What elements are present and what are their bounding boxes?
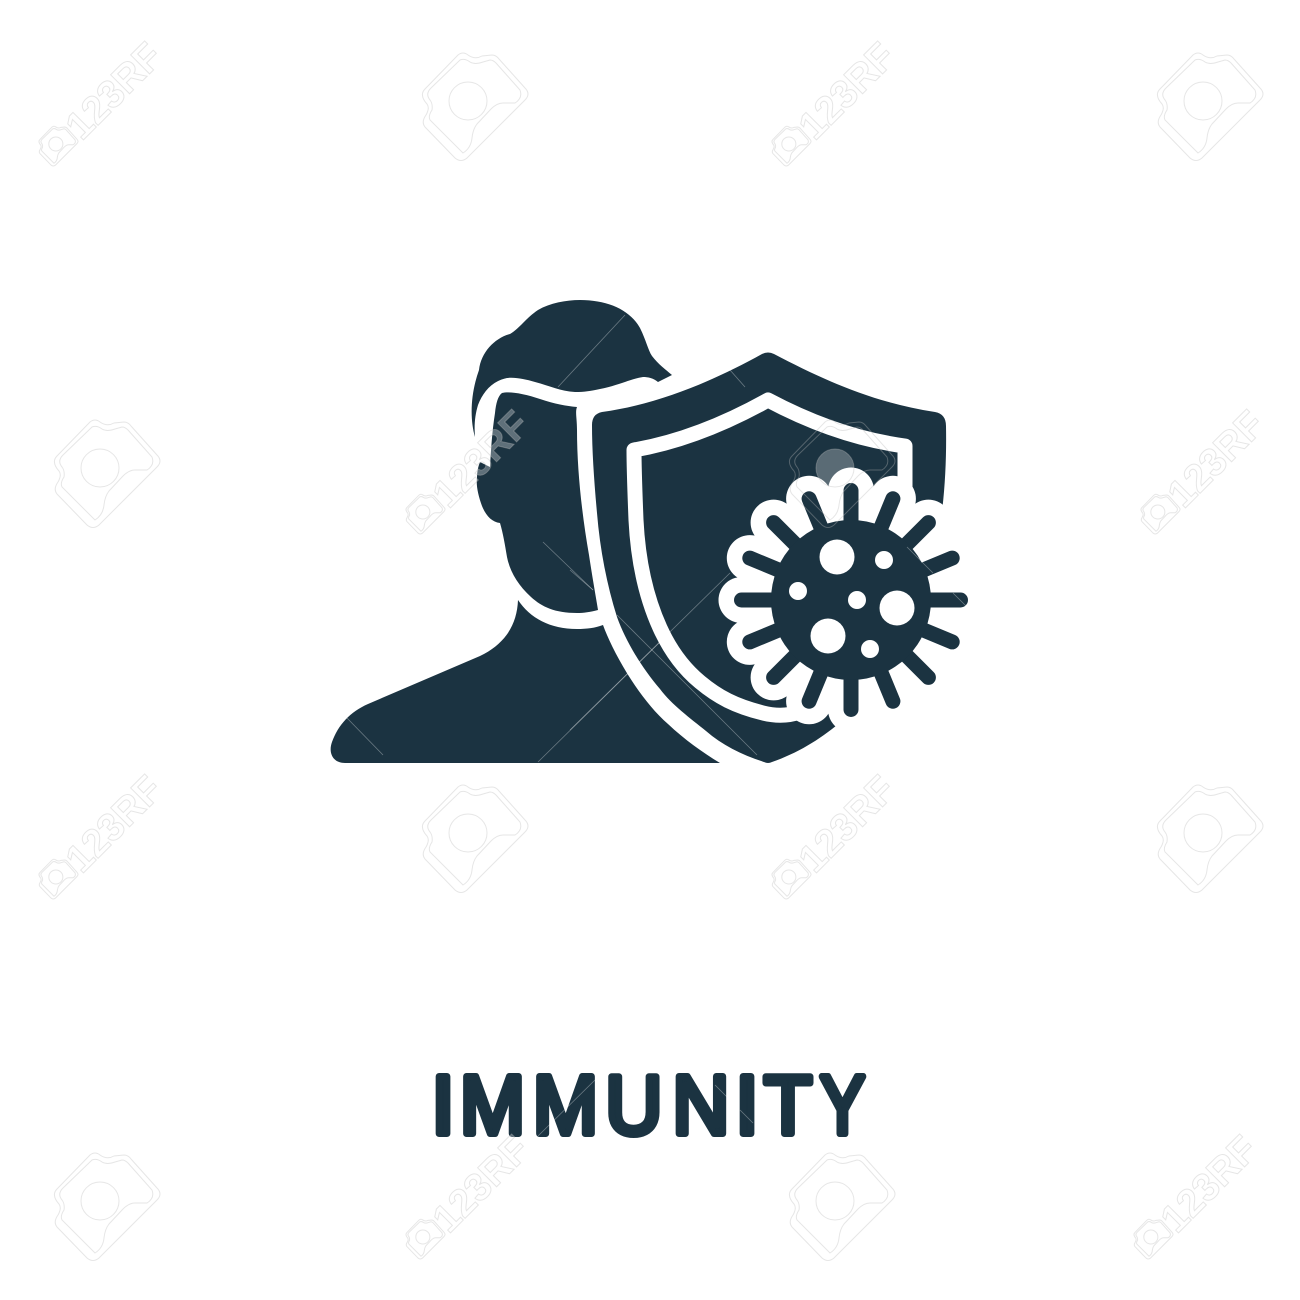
logo mark 8	[789, 1153, 895, 1260]
icon: person with shield and virus	[331, 300, 966, 763]
title: T	[764, 1058, 812, 1152]
watermark mark 5: 123RF	[58, 768, 171, 881]
logo mark 1	[422, 53, 528, 160]
watermark mark 7: 123RF	[425, 1128, 538, 1241]
logo mark 4	[789, 420, 895, 528]
watermark mark 5	[19, 763, 175, 919]
title: M	[460, 1058, 525, 1152]
icon: virus	[736, 485, 966, 715]
virus spikes	[742, 490, 960, 710]
logo mark 7	[54, 1153, 160, 1260]
title: N	[672, 1058, 729, 1152]
watermark mark 4	[1121, 398, 1277, 554]
watermark mark 8: 123RF	[1153, 1128, 1266, 1241]
watermark mark 2	[752, 30, 908, 186]
watermark mark 8	[1114, 1123, 1270, 1279]
logo mark 6	[1157, 785, 1263, 892]
virus halo	[736, 485, 966, 715]
virus spots	[789, 540, 914, 658]
title: Y	[820, 1058, 865, 1152]
logo mark 5	[422, 785, 528, 892]
icon: shield	[592, 352, 946, 763]
watermark mark 4: 123RF	[1160, 403, 1273, 516]
watermark mark 6: 123RF	[791, 768, 904, 881]
icon: face	[477, 392, 598, 613]
watermark: hairlines	[347, 315, 967, 1136]
watermark mark 2: 123RF	[791, 35, 904, 148]
icon: shoulders	[331, 600, 720, 763]
title: I	[432, 1058, 455, 1152]
logo mark 3	[54, 420, 160, 528]
title: I	[736, 1058, 759, 1152]
watermark mark 3: 123RF	[425, 403, 538, 516]
watermark mark 1	[19, 30, 175, 186]
watermark mark 1: 123RF	[58, 35, 171, 148]
logo mark 2	[1157, 53, 1263, 160]
icon: inner shield border	[634, 400, 905, 715]
virus body	[771, 520, 931, 680]
title: M	[533, 1058, 598, 1152]
watermark mark 3	[386, 398, 542, 554]
watermark mark 7	[386, 1123, 542, 1279]
watermark mark 6	[752, 763, 908, 919]
title: U	[606, 1058, 662, 1152]
icon: hair	[472, 300, 672, 437]
